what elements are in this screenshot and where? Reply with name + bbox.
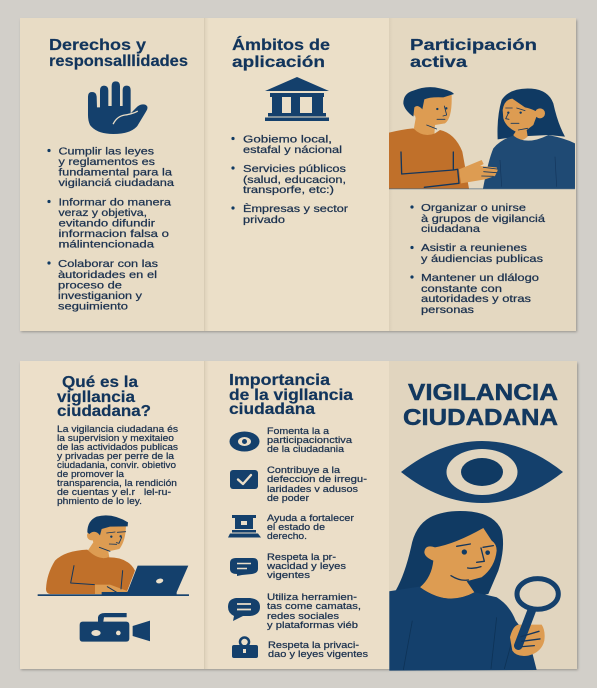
text block: definition: phmiento de lo ley. [57,496,142,507]
heading: que es [57,374,151,420]
text block: definition: la supervision y mexitaieo [57,433,174,444]
item: fomenta: participacionctiva [267,435,353,446]
heading: importancia: Importancia [229,372,330,389]
bullet list: participacion: à grupos de vigilanciá [421,214,545,225]
text block: definition: de cuentas y el.r lel-ru- [57,487,171,498]
title: VIGILANCIA [408,379,558,405]
bullet list: participacion: Mantener un dlálogo [421,273,539,284]
item: utiliza: Utiliza herramien- [267,592,357,603]
text block: definition: La vigilancia ciudadana és [57,424,178,435]
icon: raised hand [88,81,147,134]
heading: derechos: Derechos y [49,37,146,54]
bullet list: ambitos: Servicies públicos [243,164,346,175]
item: contribuye: de poder [267,493,309,504]
heading: importancia: ciudadana [229,401,315,418]
item: ayuda: Ayuda a fortalecer [267,513,354,524]
heading: que es: vigllancia [57,389,135,406]
item: ayuda [228,513,354,542]
bullet list: ambitos: privado [243,215,285,226]
illustration: woman with magnifying glass [389,511,558,671]
heading: ambitos: aplicación [232,54,325,71]
bullet list: derechos: y reglamentos es [58,157,155,168]
heading: participacion [410,37,537,71]
bullet list: derechos: veraz y objetiva, [58,208,147,219]
item: respeta leyes: dao y leyes vigentes [268,649,368,660]
item: ayuda: derecho. [267,531,307,542]
icon: padlock [232,638,258,658]
item: fomenta: de la ciudadania [267,444,345,455]
bullet list: participacion: autoridades y otras [421,294,531,305]
bullet list: derechos: investiganion y [58,291,143,302]
bullet list: derechos: evitando difundir [58,218,156,230]
panel: participacion activa [389,18,576,331]
bullet list: derechos: vigilanciá ciudadana [58,178,174,189]
item: ayuda: el estado de [267,522,325,533]
item: respeta privacidad [230,552,346,581]
heading: que es: ciudadana? [57,403,151,420]
bullet list: ambitos: (salud, educacion, [243,175,346,186]
heading: que es: Qué es la [62,374,138,391]
panel: portada vigilancia ciudadana [389,361,577,671]
bullet list: ambitos: estafal y nácional [243,145,342,156]
bullet list: derechos: málintencionada [58,240,154,250]
bullet list: ambitos: transporfe, etc:) [243,185,334,196]
item: contribuye [230,465,367,504]
heading: derechos: responsalllidades [49,53,188,70]
item: respeta privacidad: Respeta la pr- [267,552,336,563]
item: utiliza: tas come camatas, [267,601,361,612]
icon: speech bubble large [228,598,260,621]
panel: importancia [205,361,389,669]
heading: ambitos [232,37,330,71]
bullet list: derechos: Informar do manera [58,198,171,208]
icon: video camera [80,613,150,642]
item: contribuye: laridades v adusos [267,484,358,495]
item: contribuye: Contribuye a la [267,465,341,476]
item: respeta privacidad: wacidad y leyes [266,561,346,572]
icon: check box [230,470,258,489]
bullet list: participacion: Asistir a reunienes [421,243,527,254]
bullet list: ambitos [231,134,349,226]
panel: que es la vigilancia ciudadana [20,361,205,669]
bullet list: derechos [47,146,174,312]
icon: eye [230,432,260,452]
bullet list: ambitos: Gobiemo local, [243,134,332,146]
bullet list: derechos: Colaborar con las [58,259,158,270]
illustration: man and woman talking [389,87,575,189]
bullet list: derechos: fundamental para la [58,168,172,178]
item: respeta privacidad: vigentes [267,570,310,581]
text block: definition: de las actividados publicas [57,442,178,453]
heading: derechos [49,37,188,70]
title: CIUDADANA [403,404,558,430]
panel: ambitos de aplicacion [205,18,389,331]
panel: derechos y responsabilidades [20,18,205,331]
text block: definition: ciudadania, convir. obietivo [57,460,176,471]
icon: large eye [401,441,563,503]
item: fomenta: Fomenta la a [267,426,330,437]
heading: ambitos: Ámbitos de [232,37,330,54]
heading: importancia: de la vigllancia [229,387,353,404]
bullet list: participacion: personas [421,305,474,316]
item: utiliza: redes sociales [267,611,339,622]
item: contribuye: defeccion de irregu- [267,474,367,485]
bullet list: participacion [410,203,545,316]
text block: definition: y privadas per perre de la [57,451,175,462]
item: fomenta [230,426,353,455]
bullet list: participacion: constante con [421,284,502,295]
icon: speech bubble [230,558,258,576]
item: utiliza [228,592,361,631]
bullet list: derechos: seguimiento [58,302,128,312]
bullet list: derechos: Cumplir las leyes [58,146,154,158]
icon: monument [228,515,261,538]
text block: definition: de promover la [57,469,125,480]
title [403,379,558,430]
heading: participacion: Participación [410,37,537,54]
illustration: man at laptop [38,515,189,596]
bullet list: participacion: y áudiencias publicas [421,254,543,265]
text block: definition [57,424,178,507]
bullet list: participacion: Organizar o unirse [421,203,526,214]
item: utiliza: y plataformas viéb [267,620,358,631]
bullet list: derechos: informacion falsa o [58,229,169,240]
text block: definition: transparencia, la rendición [57,478,177,489]
bullet list: participacion: ciudadana [421,224,480,235]
bullet list: derechos: àutoridades en el [58,270,157,281]
bullet list: ambitos: Èmpresas y sector [243,202,349,215]
bullet list: derechos: proceso de [58,280,122,292]
icon: institution building [265,77,329,121]
heading: importancia [229,372,353,418]
item: respeta leyes: Respeta la privaci- [268,640,359,651]
item: respeta leyes [232,638,368,660]
heading: participacion: activa [410,54,467,71]
